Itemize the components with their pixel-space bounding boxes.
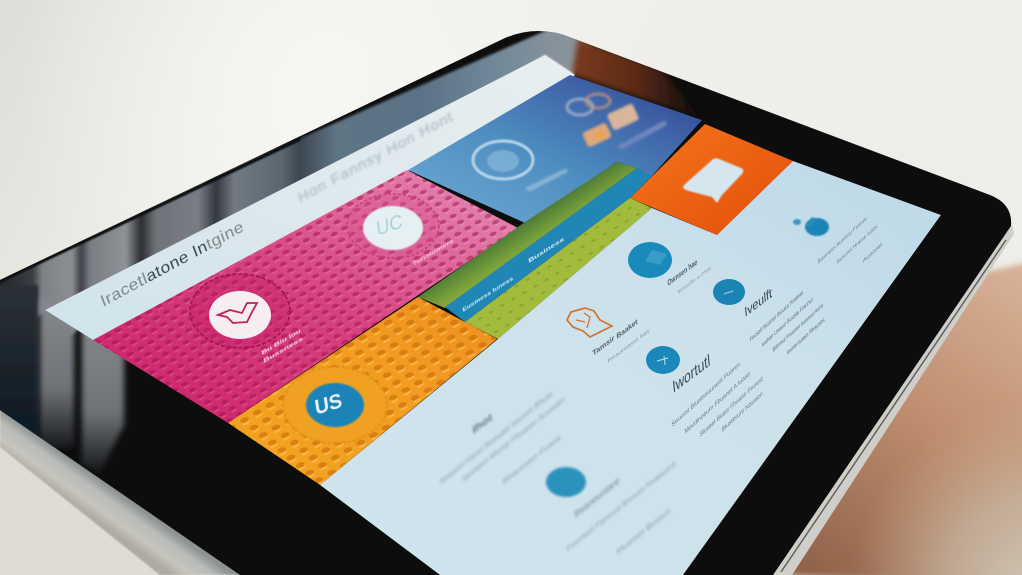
peach reflection on table xyxy=(770,262,1022,575)
panel: pink: Bussness xyxy=(263,335,304,365)
panel: light content xyxy=(320,161,941,575)
panel: green stripes: Business xyxy=(528,236,565,265)
bezel reflections xyxy=(0,20,700,472)
header band: Hon Fannsy Hon Hont xyxy=(296,109,455,206)
item: circle centre: Seuorst Biuatssuunent Fuares xyxy=(671,360,741,429)
panel: green stripes xyxy=(418,162,652,339)
item: left text block: Iaunsert Munst Fbuaser Auusaet xyxy=(462,394,565,484)
item: left text block: Bhaunsert Fuans xyxy=(502,432,561,487)
item: circle lower: Fuonsert Faneunt Bsnuet Huaeusnt xyxy=(566,458,676,554)
panel: orange xyxy=(630,124,793,235)
panel: orange dotted xyxy=(228,297,497,485)
item: circle top right xyxy=(793,216,883,266)
item: left text block: Seauort Hanst Buouaet Iasnort Bhuta xyxy=(439,388,553,487)
item: circle top: Bandouhte ra Cnese xyxy=(677,265,712,296)
item: outline icon and label: Reaoreasst Itas xyxy=(607,328,650,365)
item: circle middle right: Iuahan Unasur Bousta Frauner xyxy=(762,297,813,349)
item: circle centre xyxy=(646,346,763,439)
item: circle lower: Bsaoeuntare xyxy=(574,475,620,520)
item: circle lower: Muareet Busiurt xyxy=(616,505,671,557)
item: circle top right: Ausoret xyxy=(863,241,883,265)
item: circle middle right: Bdoreut Prsamer Isaeruut Auns xyxy=(773,302,824,354)
header band xyxy=(45,55,575,340)
item: outline icon and label: Baaket xyxy=(616,316,639,341)
icon: white circle badge right: UC xyxy=(375,210,403,241)
icon: US badge xyxy=(283,367,387,443)
panel: blue xyxy=(408,75,702,223)
item: circle lower xyxy=(546,458,676,557)
item: circle middle right: Iavnarnutars Rhauses xyxy=(787,317,825,357)
item: circle centre: Biusterunt Nauaen xyxy=(721,390,763,434)
panel: pink xyxy=(93,170,518,423)
item: outline icon and label: Tamsir xyxy=(592,333,615,358)
stripe labels: Eusmess Iuness xyxy=(462,275,514,314)
panel: pink: Tunstomers xyxy=(412,237,455,268)
item: circle middle right: Iveulft xyxy=(744,284,773,320)
silver edge right xyxy=(770,225,1014,575)
item: left text block: Ihot xyxy=(472,411,493,437)
item: circle top: Ownsen hae xyxy=(667,257,698,288)
icon: white circle badge right xyxy=(347,194,439,258)
small icons xyxy=(567,94,667,150)
item: circle middle right: Feuselt fsuaner Ibousa Hrateas xyxy=(750,290,804,344)
item: circle top xyxy=(628,242,712,296)
pink panel labels: Bu Biu Iou xyxy=(261,328,302,357)
icon: white circle badge left xyxy=(190,274,290,348)
item: circle middle right xyxy=(713,279,825,357)
icon: speech card xyxy=(683,158,743,203)
icon: US badge: US xyxy=(313,389,344,420)
item: circle centre: Meudinoeurn Fbuanet A Iuase xyxy=(684,370,751,436)
item: circle top right: Basiness Ausnsiu Firsnre xyxy=(818,216,867,266)
title: Iracetlatone Intgine xyxy=(98,217,246,310)
item: circle centre: Slusaet Buasr Fhuase Prurest xyxy=(699,375,763,439)
item: circle centre: Iwortutl xyxy=(672,351,711,397)
silver edge lower left xyxy=(0,405,245,575)
screen xyxy=(45,55,941,575)
item: outline icon and label xyxy=(567,308,650,365)
item: circle top right: Ausoret Hrame Iusta xyxy=(837,223,878,266)
